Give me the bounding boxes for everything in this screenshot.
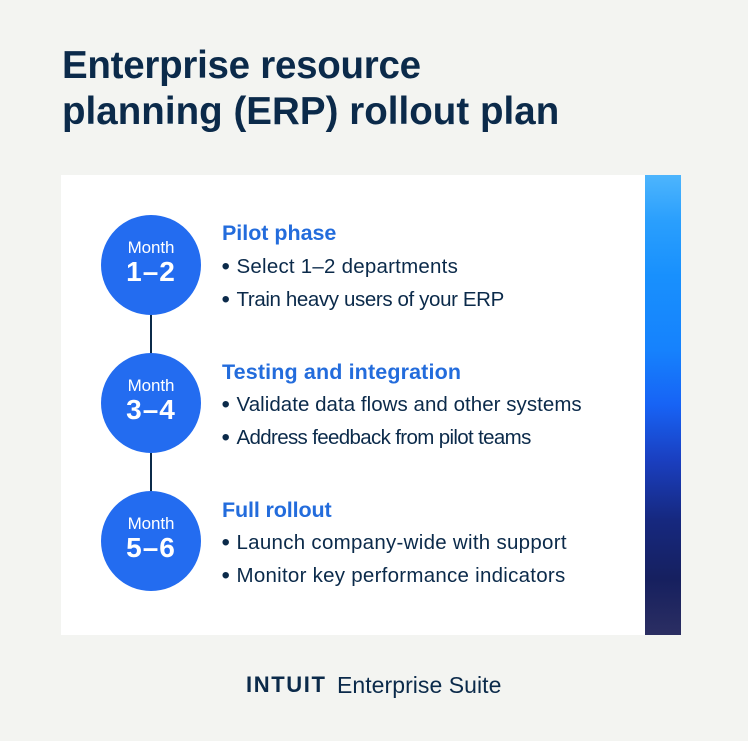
heading: pilot phase: Pilot phase <box>222 221 336 245</box>
connector: month 3-4 to 5-6 <box>150 453 152 492</box>
gradient side bar <box>645 175 681 635</box>
step badge: month 1-2: 1–2 <box>126 256 176 287</box>
panel: timeline card <box>61 175 681 635</box>
bullet: validate data: Validate data flows and other systems <box>236 393 582 416</box>
bullet: address feedback: • <box>222 424 230 451</box>
logo: Intuit Enterprise Suite: INTUIT <box>246 672 326 697</box>
step badge: month 1-2 <box>101 215 201 315</box>
title: Enterprise resource <box>62 44 421 87</box>
title <box>62 44 559 133</box>
title: planning (ERP) rollout plan <box>62 90 559 133</box>
step badge: month 3-4: 3–4 <box>126 394 176 425</box>
step badge: month 5-6: 5–6 <box>126 532 176 563</box>
bullet: launch: Launch company-wide with support <box>236 531 567 554</box>
bullet: monitor: • <box>222 562 230 589</box>
connector: month 1-2 to 3-4 <box>150 315 152 354</box>
step badge: month 5-6 <box>101 491 201 591</box>
logo: Intuit Enterprise Suite <box>246 672 501 698</box>
bullet: train users: • <box>222 286 230 313</box>
step badge: month 5-6: Month <box>128 514 174 533</box>
bullet: launch: • <box>222 529 230 556</box>
logo: Intuit Enterprise Suite: Enterprise Suite <box>337 672 501 698</box>
step badge: month 3-4: Month <box>128 376 174 395</box>
bullet: select departments: Select 1–2 departments <box>236 255 458 278</box>
heading: full rollout: Full rollout <box>222 498 332 522</box>
step badge: month 3-4 <box>101 353 201 453</box>
bullet: monitor: Monitor key performance indicators <box>236 564 566 587</box>
bullet: validate data: • <box>222 391 230 418</box>
bullet: address feedback: Address feedback from pilot teams <box>236 426 531 449</box>
step badge: month 1-2: Month <box>128 238 174 257</box>
heading: testing and integration: Testing and integration <box>222 360 461 384</box>
bullet: select departments: • <box>222 253 230 280</box>
bullet: train users: Train heavy users of your ERP <box>236 288 504 311</box>
